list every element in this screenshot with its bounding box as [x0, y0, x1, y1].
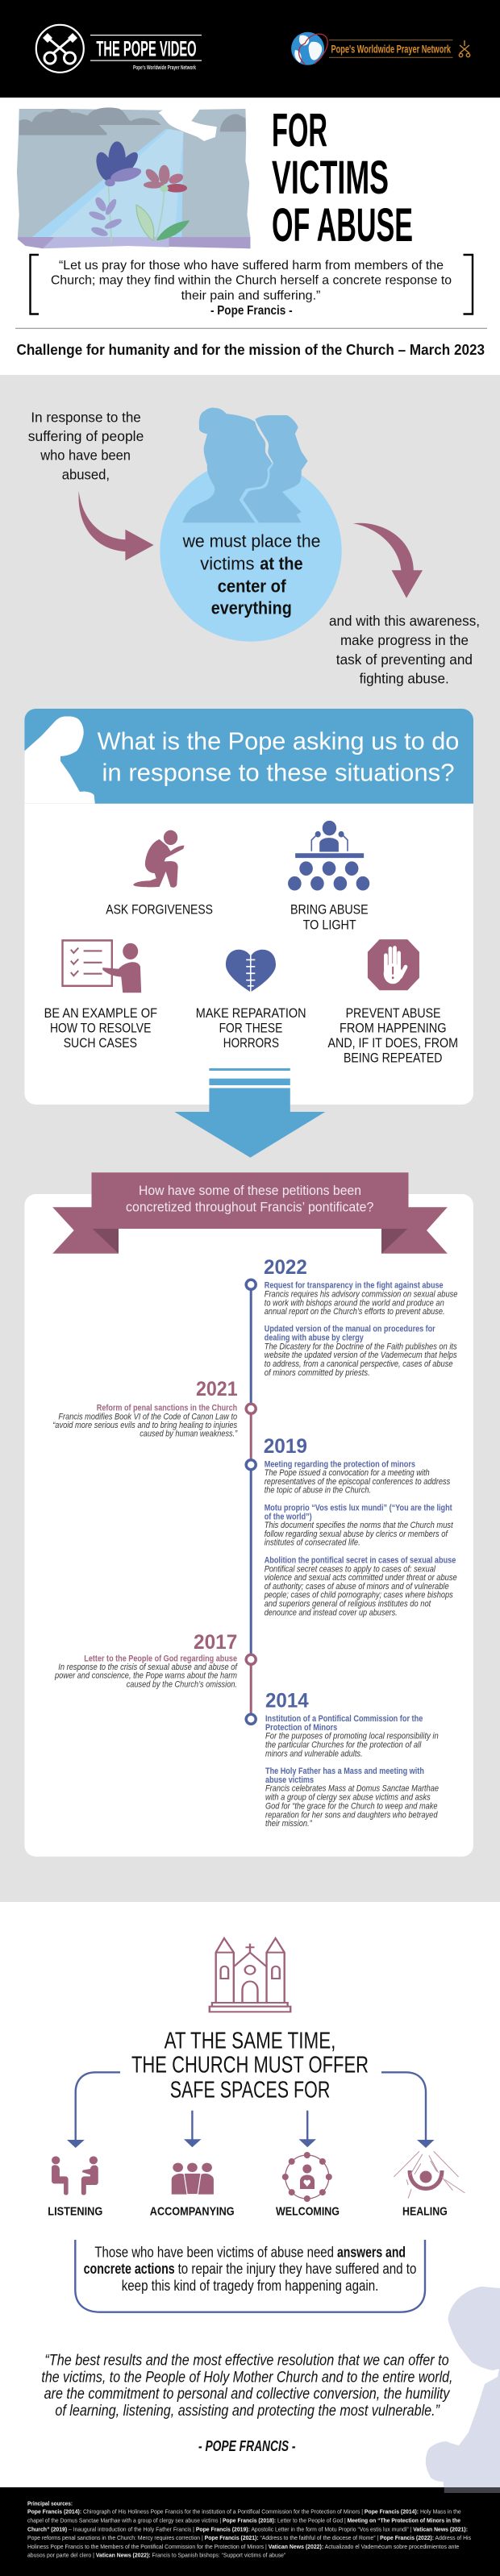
label: be an example — [44, 1005, 157, 1051]
timeline: 2022: of minors committed by priests. — [265, 1368, 370, 1378]
center circle with silhouettes: we must place the — [182, 531, 320, 551]
timeline: 2021 — [52, 1378, 238, 1439]
timeline: 2014: Protection of Minors — [265, 1723, 337, 1733]
label: prevent abuse: AND, IF IT DOES, FROM — [327, 1035, 458, 1051]
timeline: 2014: reparation for her sons and daughters who betrayed — [265, 1810, 438, 1820]
icon: accompanying — [172, 2163, 214, 2195]
callout box: answers and concrete actions — [75, 2240, 425, 2312]
gray section background — [0, 375, 500, 1902]
icon: man silhouette — [243, 415, 308, 522]
label: prevent abuse: FROM HAPPENING — [340, 1021, 447, 1035]
closing quote: - POPE FRANCIS - — [198, 2438, 295, 2454]
timeline: 2019: The Pope issued a convocation for a meeting with — [265, 1468, 430, 1478]
timeline: 2017: Letter to the People of God regarding abuse — [84, 1654, 237, 1663]
timeline: 2019: Abolition the pontifical secret in cases of sexual abuse — [265, 1556, 456, 1566]
logo: Pope's Worldwide Prayer Network — [291, 32, 470, 65]
labels: four spaces: WELCOMING — [276, 2204, 340, 2218]
title: FOR — [272, 105, 327, 157]
arrow: curved down — [353, 523, 423, 598]
timeline: 2017: caused by the Church’s omission. — [127, 1680, 237, 1690]
icon: welcoming — [282, 2152, 332, 2202]
callout box: answers and concrete actions: keep this kind of tragedy from happening again. — [122, 2278, 378, 2294]
footer: sources: abusos por parte del clero | Vatican News (2022): Francis to Spanish bishops: “Support victims of abuse” — [27, 2553, 286, 2559]
timeline: 2022: Request for transparency in the fight against abuse — [265, 1280, 444, 1290]
panel heading band — [24, 709, 473, 804]
panel: timeline — [24, 1194, 473, 1857]
center circle with silhouettes: victims — [200, 554, 255, 574]
header band — [0, 0, 500, 98]
timeline: 2021: “avoid more serious evils and to bring healing to injuries — [52, 1421, 238, 1430]
illustration: dove and flowers — [17, 105, 250, 248]
icon: praying pope silhouette — [24, 716, 95, 804]
label: bring abuse to light — [290, 902, 369, 932]
timeline: 2014: minors and vulnerable adults. — [265, 1749, 363, 1758]
labels: four spaces: LISTENING — [48, 2204, 102, 2218]
timeline: 2021: 2021 — [196, 1378, 238, 1400]
panel heading band: in response to these situations? — [102, 759, 455, 787]
prayer quote with brackets: their pain and suffering.” — [181, 289, 320, 302]
footer: sources: Principal sources: — [27, 2501, 73, 2507]
footer: sources: Holiness Pope Francis to the Members of the Pontifical Commission for the Protection of Minors | Vatican News (2022): Actualizado el Vademécum sobre procedimientos ante — [27, 2545, 459, 2550]
timeline: 2019: denounce and instead cover up abusers. — [265, 1608, 398, 1618]
callout box: answers and concrete actions: answers and — [337, 2244, 406, 2260]
timeline: 2017: 2017 — [194, 1631, 237, 1654]
icon: listening — [52, 2156, 98, 2195]
center circle with silhouettes — [160, 408, 342, 642]
timeline: 2014: Institution of a Pontifical Commission for the — [265, 1714, 423, 1724]
callout box: answers and concrete actions: Those who have been victims of abuse need — [94, 2244, 334, 2260]
callout box: answers and concrete actions: to repair the injury they have suffered and to — [178, 2261, 416, 2277]
logo: The Pope Video — [36, 25, 202, 73]
timeline: 2014: For the purposes of promoting local responsibility in — [265, 1732, 439, 1742]
timeline: 2019: people; cases of child pornography; cases where bishops — [264, 1591, 453, 1600]
center circle with silhouettes: center of — [218, 576, 286, 596]
timeline: 2022: Francis requires his advisory commission on sexual abuse — [265, 1289, 457, 1299]
timeline: 2019: Motu proprio “Vos estis lux mundi” (“You are the light — [265, 1503, 452, 1513]
label: make reparation: FOR THESE — [219, 1021, 282, 1035]
timeline: 2022: to work with bishops around the world and produce an — [265, 1298, 444, 1308]
center circle with silhouettes: everything — [211, 598, 292, 618]
intro text right: task of preventing and — [336, 651, 473, 668]
prayer quote with brackets: - Pope Francis - — [210, 304, 293, 318]
arrow: to healing — [381, 2072, 434, 2148]
heading: safe spaces: AT THE SAME TIME, — [165, 2029, 335, 2054]
icon: stop hand — [368, 939, 419, 990]
label: bring abuse to light: TO LIGHT — [303, 918, 356, 932]
heading: safe spaces: THE CHURCH MUST OFFER — [131, 2053, 369, 2079]
timeline: 2022 — [264, 1256, 457, 1378]
timeline: 2019: violence and sexual acts committed under threat or abuse — [265, 1573, 457, 1583]
timeline: 2019: 2019 — [264, 1435, 307, 1458]
intro text right: make progress in the — [340, 632, 469, 648]
footer: sources: chapel of the Domus Sanctae Marthae with a group of clergy sex abuse victims | Pope Francis (2018): Letter to the People of God | Meeting on “The Protection of Minors in the — [27, 2519, 460, 2524]
ribbon heading: concretized throughout Francis’ pontificate? — [126, 1201, 373, 1215]
icon: kneeling person — [133, 830, 185, 888]
intro text right — [329, 613, 480, 687]
arrow: to welcoming — [298, 2111, 316, 2147]
timeline: 2019 — [264, 1435, 457, 1618]
icon: healing — [394, 2151, 465, 2199]
label: make reparation: HORRORS — [223, 1035, 279, 1051]
footer: sources: Pope reforms penal sanctions in the Church: Mercy requires correction | Pope Francis (2021): “Address to the faithful of the diocese of Rome” | Pope Francis (2022): Address of His — [27, 2536, 471, 2541]
icon: podium and audience — [288, 821, 369, 891]
ribbon heading — [52, 1172, 448, 1254]
icon: checklist and person — [62, 940, 141, 993]
timeline: 2019: follow regarding sexual abuse by clerics or members of — [265, 1529, 448, 1539]
arrow: to accompanying — [184, 2111, 202, 2147]
title: VICTIMS — [272, 152, 389, 204]
icons in zoom coordinates — [62, 821, 419, 993]
ribbon heading: How have some of these petitions been — [139, 1184, 361, 1198]
timeline: 2022: website the updated version of the Vademecum that helps — [265, 1350, 457, 1360]
timeline: 2021: caused by human weakness.” — [140, 1429, 238, 1439]
timeline: 2014: 2014 — [265, 1689, 309, 1712]
timeline: 2022: 2022 — [264, 1256, 307, 1279]
timeline: 2017 — [54, 1631, 238, 1690]
timeline: 2021: Francis modifies Book VI of the Code of Canon Law to — [58, 1412, 237, 1421]
label: ask forgiveness: ASK FORGIVENESS — [106, 902, 213, 918]
footer: sources: Pope Francis (2014): Chirograph of His Holiness Pope Francis for the institution of a Pontifical Commission for the Protection of Minors | Pope Francis (2014): Holy Mass in the — [27, 2510, 461, 2516]
heading: safe spaces — [131, 2029, 369, 2104]
arrow: curved to circle — [79, 491, 154, 560]
icon: church — [210, 1938, 290, 2012]
label: make reparation — [196, 1005, 306, 1051]
labels: four spaces — [48, 2204, 448, 2218]
arrow: big blue down — [174, 1068, 325, 1158]
timeline: 2014: with a group of clergy sex abuse victims and asks — [265, 1793, 431, 1803]
label: bring abuse to light: BRING ABUSE — [290, 902, 369, 918]
timeline: 2019: Pontifical secret ceases to apply to cases of: sexual — [265, 1564, 435, 1574]
intro text left — [28, 409, 144, 482]
timeline: 2019: institutes of consecrated life. — [265, 1538, 360, 1548]
prayer quote with brackets: “Let us pray for those who have suffered harm from members of the — [59, 259, 444, 273]
label: prevent abuse: BEING REPEATED — [344, 1050, 442, 1066]
label: prevent abuse: PREVENT ABUSE — [346, 1005, 440, 1021]
timeline: 2022: dealing with abuse by clergy — [265, 1334, 364, 1343]
timeline: 2014: Francis celebrates Mass at Domus Sanctae Marthae — [265, 1784, 439, 1794]
arrow: to listening — [67, 2072, 120, 2148]
footer: sources: Church” (2019) – Inaugural introduction of the Holy Father Francis | Pope Francis (2019): Apostolic Letter in the form of Motu Proprio “Vos estis lux mundi” | Vatican News (2021): — [27, 2527, 468, 2532]
labels: four spaces: ACCOMPANYING — [150, 2204, 235, 2218]
labels: four spaces: HEALING — [402, 2204, 448, 2218]
callout box: answers and concrete actions: concrete actions — [84, 2261, 175, 2277]
timeline: 2019: of authority; cases of abuse of minors and of vulnerable — [265, 1582, 449, 1592]
timeline: 2019: the topic of abuse in the Church. — [265, 1486, 371, 1496]
timeline: 2019: of the world”) — [265, 1512, 312, 1521]
label: be an example: BE AN EXAMPLE OF — [44, 1005, 157, 1021]
icon: woman silhouette — [182, 408, 272, 522]
timeline: 2022: The Dicastery for the Doctrine of the Faith publishes on its — [265, 1342, 457, 1351]
timeline: 2019: and superiors general of religious institutes do not — [265, 1600, 431, 1609]
footer: sources — [0, 2487, 500, 2576]
timeline: 2014: The Holy Father has a Mass and meeting with — [265, 1767, 424, 1776]
intro text left: abused, — [62, 466, 110, 482]
timeline: 2019: Meeting regarding the protection of minors — [265, 1459, 415, 1469]
silhouette: praying pope lower right — [426, 2287, 500, 2493]
timeline: 2022: Updated version of the manual on procedures for — [265, 1325, 435, 1334]
heading: safe spaces: SAFE SPACES FOR — [170, 2078, 330, 2104]
panel: what is the Pope asking — [24, 709, 473, 1105]
logo: The Pope Video: THE POPE VIDEO — [96, 37, 197, 61]
timeline: 2014: their mission.” — [265, 1819, 313, 1829]
timeline: 2017: power and conscience, the Pope warns about the harm — [54, 1671, 237, 1681]
timeline axis — [246, 1280, 256, 1724]
timeline: 2017: In response to the crisis of sexual abuse and abuse of — [58, 1663, 238, 1672]
intro text left: who have been — [40, 447, 131, 464]
timeline: 2014: God for “the grace for the Church to weep and make — [265, 1801, 437, 1811]
label: be an example: HOW TO RESOLVE — [50, 1021, 151, 1035]
intro text left: suffering of people — [28, 428, 144, 444]
panel heading band: What is the Pope asking us to do — [98, 726, 459, 755]
timeline: 2021: Reform of penal sanctions in the Church — [97, 1403, 237, 1413]
timeline: 2019: This document specifies the norms that the Church must — [265, 1521, 454, 1530]
label: be an example: SUCH CASES — [64, 1035, 137, 1051]
timeline: 2014: the particular Churches for the protection of all — [265, 1740, 422, 1750]
timeline: 2022: to address, from a canonical perspective, cases of abuse — [265, 1359, 453, 1369]
title — [272, 105, 413, 252]
closing quote — [41, 2351, 453, 2454]
prayer quote with brackets: Church; may they find within the Church herself a concrete response to — [51, 274, 452, 288]
prayer quote with brackets — [31, 255, 473, 318]
timeline: 2022: annual report on the Church’s efforts to prevent abuse. — [265, 1307, 445, 1317]
intro text right: fighting abuse. — [360, 671, 449, 687]
timeline: 2014 — [265, 1689, 439, 1829]
label: prevent abuse — [327, 1005, 458, 1066]
timeline: 2014: abuse victims — [265, 1775, 314, 1785]
intro text right: and with this awareness, — [329, 613, 480, 629]
label: make reparation: MAKE REPARATION — [196, 1005, 306, 1021]
timeline: 2019: representatives of the episcopal conferences to address — [265, 1477, 451, 1487]
icon: stitched heart — [226, 950, 276, 992]
logo: The Pope Video: Pope's Worldwide Prayer Network — [133, 65, 196, 71]
center circle with silhouettes: at the — [260, 554, 303, 574]
intro text left: In response to the — [31, 409, 141, 425]
